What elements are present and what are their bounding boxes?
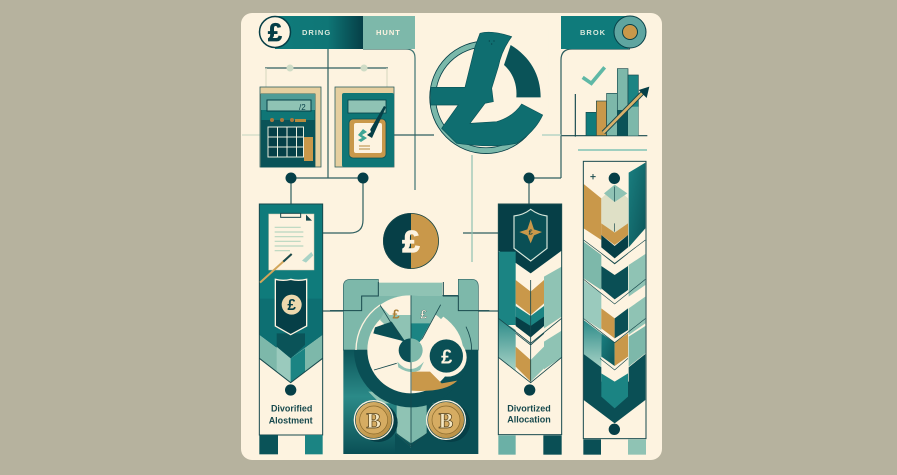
panel: middle-right banner	[498, 204, 562, 455]
panel: far-right banner	[583, 161, 646, 455]
pound body	[431, 32, 543, 146]
panel: central pie chart	[330, 279, 489, 454]
dark ring	[354, 350, 469, 407]
icon: calculator: /2	[299, 103, 306, 112]
clipboard	[260, 213, 314, 283]
axis	[562, 94, 647, 137]
small pound labels: £	[392, 308, 400, 322]
bar chart with arrow	[562, 67, 649, 137]
bars	[586, 112, 596, 136]
checkmark	[583, 67, 605, 83]
header pound icon	[260, 16, 290, 48]
ring	[433, 44, 539, 151]
card panel	[241, 13, 662, 460]
panel: central pie chart: £	[420, 308, 427, 322]
shield with pound: £	[287, 297, 296, 314]
frame	[343, 279, 478, 350]
gold wedge	[412, 372, 457, 391]
shield with pound	[275, 279, 307, 335]
connector nodes	[286, 64, 534, 184]
label: diversified allotment: Divorified	[271, 404, 312, 414]
wedges	[380, 295, 411, 350]
header target icon	[614, 16, 646, 48]
feet	[259, 435, 278, 454]
feet	[583, 439, 601, 455]
node	[524, 384, 535, 396]
icon: calculator	[260, 87, 321, 167]
header label: brok: BROK	[580, 28, 606, 37]
header label: bring: DRING	[302, 28, 331, 37]
pound coin	[428, 338, 467, 377]
panel: left banner: Alostment	[269, 415, 313, 425]
cream leaf behind coin	[420, 317, 463, 350]
header: right tab	[561, 16, 646, 49]
connector lines	[242, 49, 647, 311]
plus sign	[590, 174, 596, 179]
header pound icon: £	[268, 19, 282, 47]
icon: split pound coin	[383, 213, 439, 269]
bitcoin right: B	[439, 408, 454, 433]
shield with star: £	[529, 227, 533, 236]
hub	[399, 338, 411, 362]
arc highlight	[356, 305, 380, 350]
bitcoin right	[426, 400, 470, 442]
feet	[498, 435, 516, 455]
top node	[609, 173, 620, 184]
arrow	[603, 93, 643, 133]
dark arc	[504, 45, 541, 97]
header label: hunt: HUNT	[376, 28, 401, 37]
icon: large pound symbol	[431, 30, 548, 151]
node	[285, 384, 296, 396]
header: left tabs	[260, 16, 415, 49]
pie base	[367, 307, 454, 393]
icon: document with pen	[335, 87, 394, 167]
label: diversified allocation: Divortized	[507, 403, 551, 413]
shield with star	[514, 209, 547, 261]
panel: middle-right banner: Allocation	[507, 415, 551, 425]
pound coin: £	[441, 346, 452, 368]
bitcoin left	[354, 400, 398, 442]
icon: split pound coin: £	[402, 224, 420, 259]
panel: left banner	[259, 204, 323, 455]
bitcoin left: B	[366, 408, 381, 433]
segments	[584, 184, 601, 240]
bottom node	[609, 424, 620, 435]
